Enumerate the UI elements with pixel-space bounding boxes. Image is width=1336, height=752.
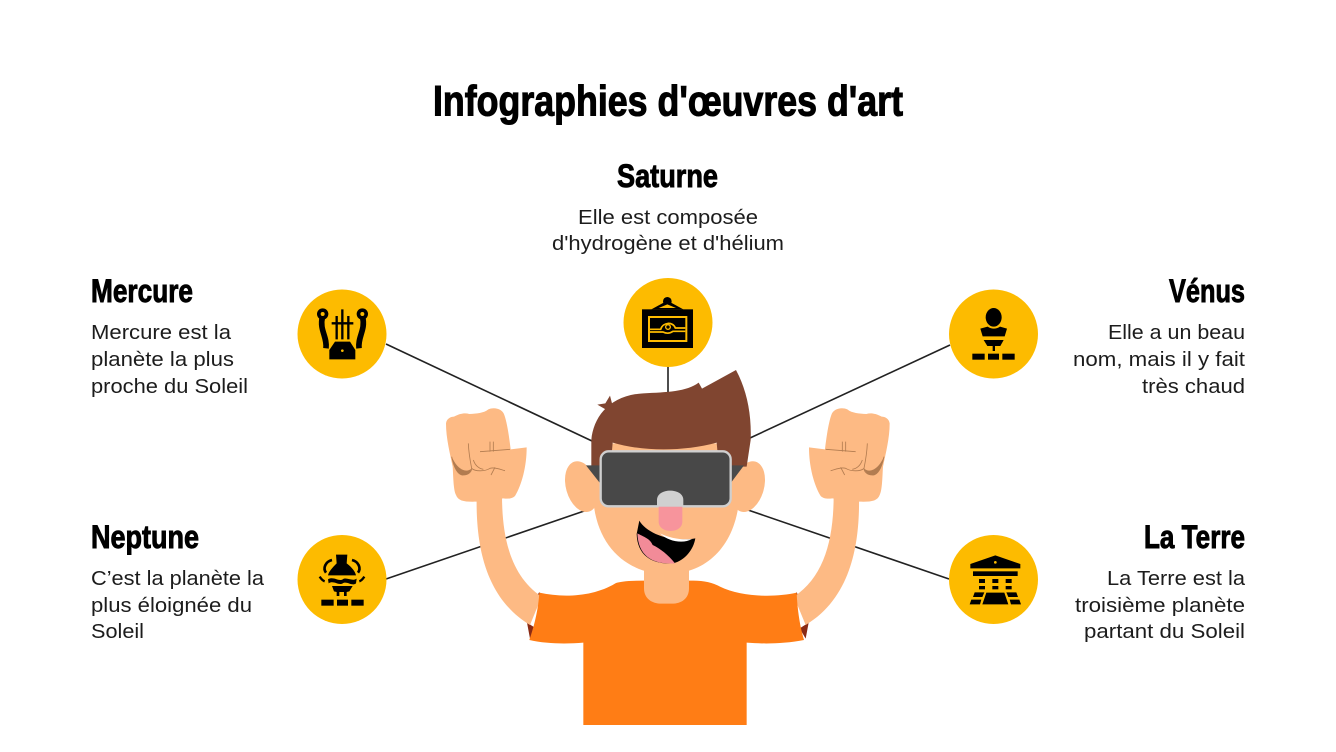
connector lines [386,344,950,579]
title: Infographies d'œuvres d'art [433,78,903,126]
neck [644,560,689,604]
text: Neptune description [91,567,265,643]
text: Vénus description: très chaud [1142,375,1245,398]
right arm and fist [794,408,890,639]
text: La Terre description: partant du Soleil [1084,620,1245,643]
panel: Saturne [552,158,784,367]
smiling mouth [637,521,695,563]
nose [657,491,683,531]
text: Mercure description: Mercure est la [91,321,232,344]
icon: vase [298,535,386,624]
orange shirt [529,581,804,725]
heading: Vénus: Vénus [1169,273,1245,309]
panel: Vénus [949,273,1245,398]
icon: lyre [298,290,386,378]
text: La Terre description: La Terre est la [1107,567,1246,590]
text: Saturne description [552,206,784,255]
text: La Terre description: troisième planète [1075,594,1245,617]
heading: Neptune: Neptune [91,519,199,555]
hair [591,370,751,467]
text: Mercure description: planète la plus [91,348,234,371]
panel: La Terre [949,519,1246,643]
panel: Neptune [91,519,386,643]
ears [559,457,771,516]
text: Mercure description: proche du Soleil [91,375,248,398]
text: Neptune description: plus éloignée du [91,594,252,617]
icon: bust [949,290,1038,378]
icon: framed painting [624,278,712,367]
text: Saturne description: Elle est composée [578,206,758,229]
illustration: boy wearing VR headset [446,370,890,725]
text: Vénus description: Elle a un beau [1108,321,1245,344]
text: Saturne description: d'hydrogène et d'hélium [552,232,784,255]
panel: Mercure [91,273,386,398]
VR headset [586,451,744,506]
text: La Terre description [1075,567,1246,643]
text: Vénus description: nom, mais il y fait [1073,348,1245,371]
icon: temple [949,535,1038,624]
text: Neptune description: C’est la planète la [91,567,265,590]
face [593,443,740,574]
heading: La Terre: La Terre [1144,519,1245,555]
text: Neptune description: Soleil [91,620,144,643]
text: Vénus description [1073,321,1245,398]
heading: Mercure: Mercure [91,273,193,309]
left arm and fist [446,408,542,639]
text: Mercure description [91,321,248,398]
heading: Saturne: Saturne [617,158,718,194]
